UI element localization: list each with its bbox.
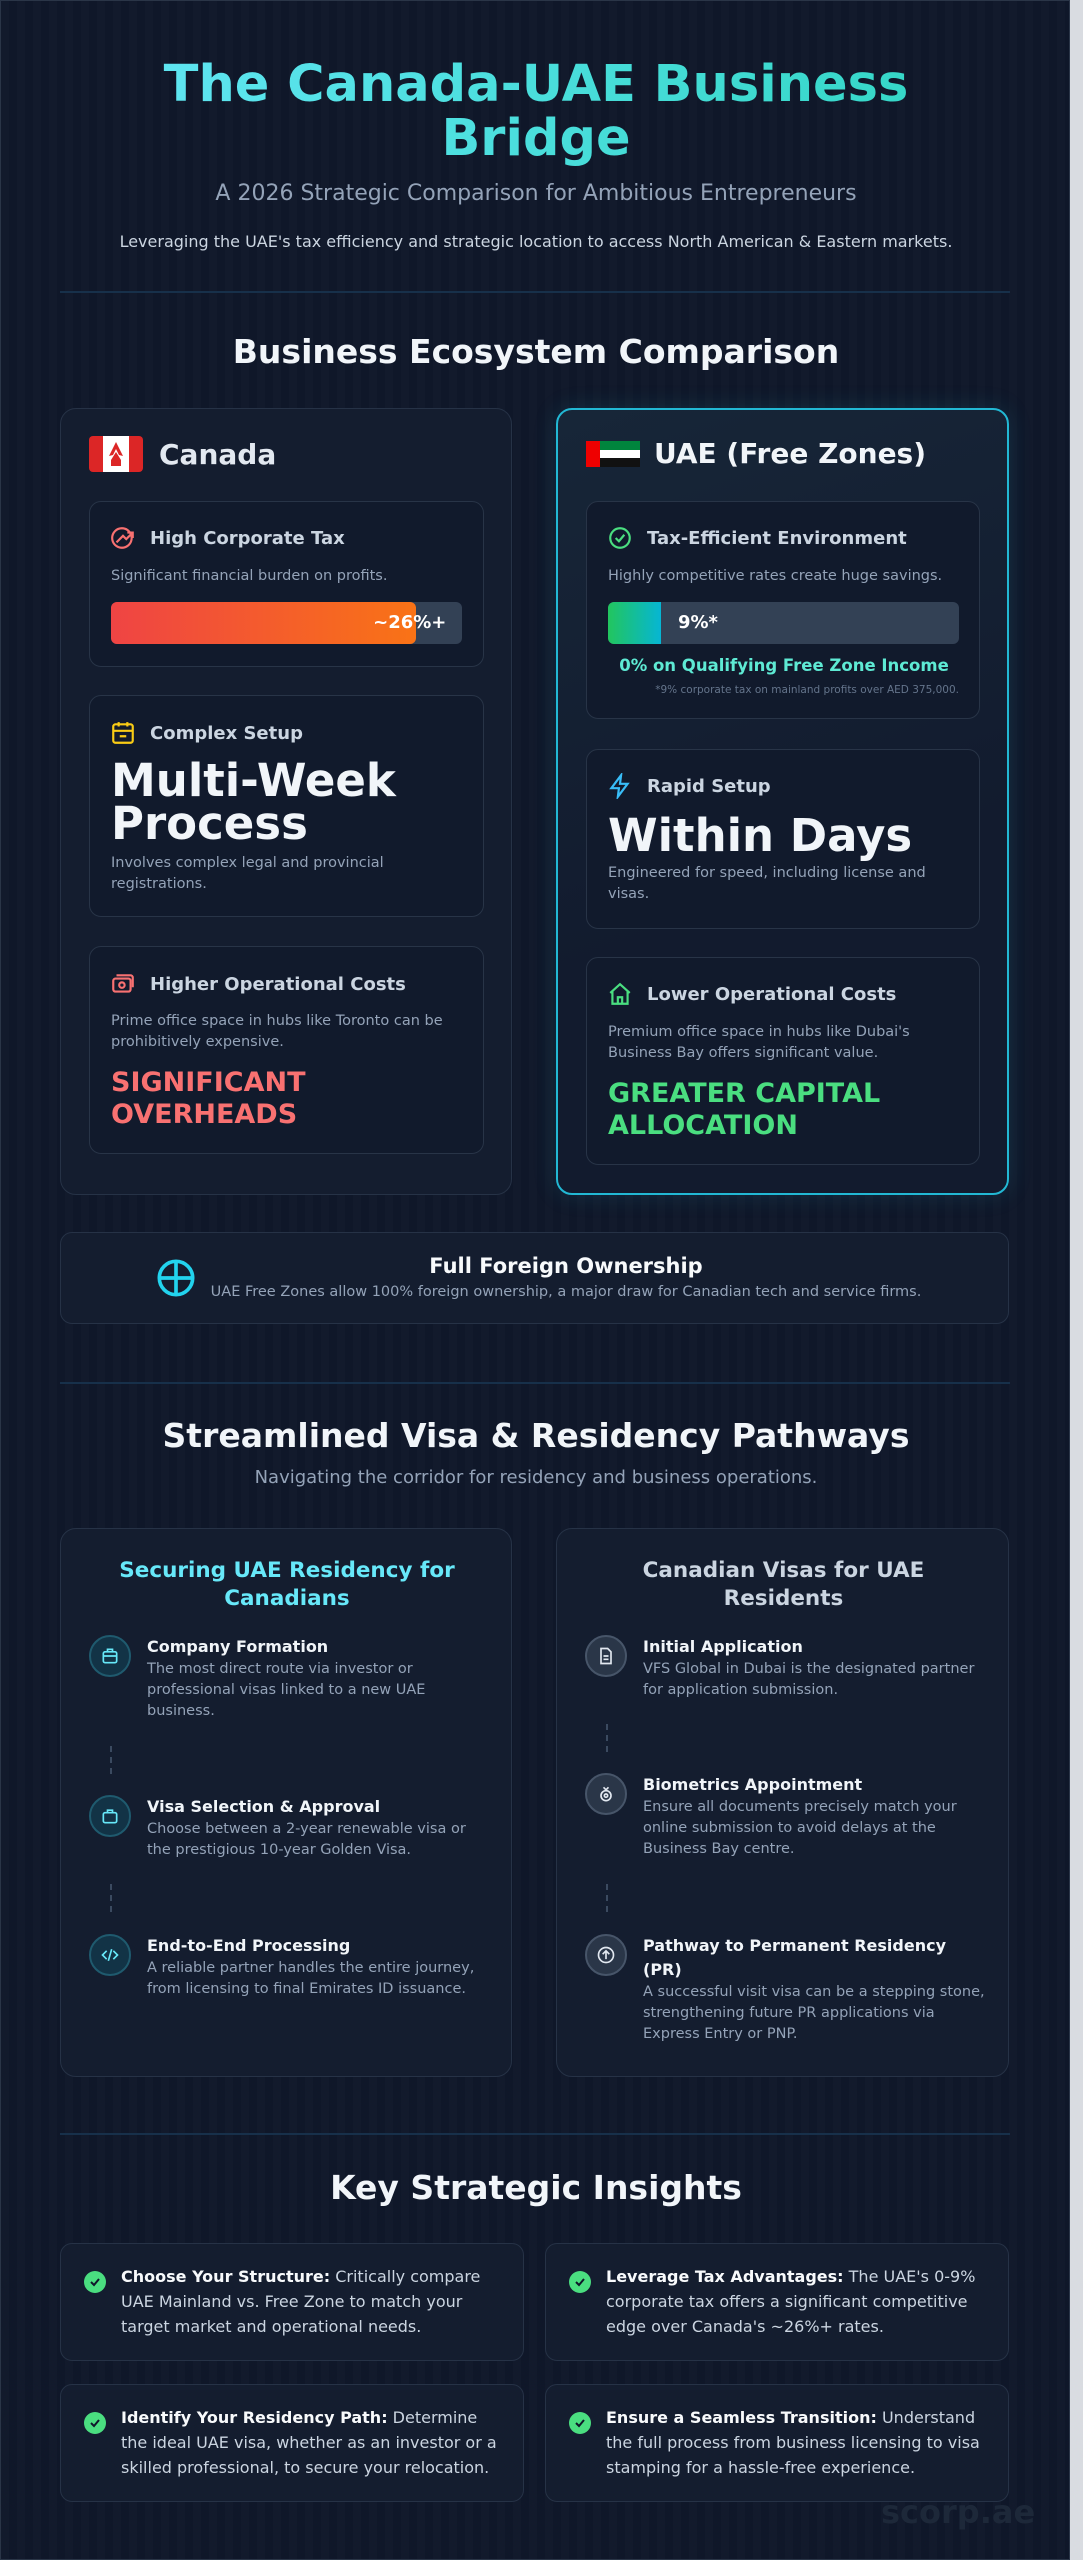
- card: tax efficient: Highly competitive rates create huge savings.: [608, 568, 942, 584]
- step: pathway to PR: [585, 1934, 985, 2042]
- callout: full foreign ownership: [60, 1232, 1009, 1324]
- tagline: Leveraging the UAE's tax efficiency and strategic location to access North American & Eastern markets.: [120, 232, 952, 251]
- title: [1, 58, 1071, 166]
- visa subtitle: Navigating the corridor for residency and business operations.: [255, 1467, 817, 1488]
- insight: structure: [60, 2243, 524, 2361]
- card: high corporate tax: Significant financial burden on profits.: [111, 568, 387, 584]
- panel: uae residency for canadians: Canadians: [224, 1586, 350, 1611]
- panel: uae residency for canadians: End-to-End Processing: [147, 1936, 350, 1955]
- card: higher operational costs: Higher Operational Costs: [150, 974, 406, 994]
- card: complex setup: [89, 695, 484, 917]
- canada header: Canada: [159, 438, 276, 470]
- card: rapid setup: [586, 749, 980, 929]
- panel: canadian visas: Ensure all documents precisely match your online submission to avoid delays at the Business Bay centre.: [643, 1799, 957, 1857]
- card: tax efficient: [586, 501, 980, 719]
- panel: uae residency for canadians: [60, 1528, 512, 2077]
- card: lower operational costs: Lower Operational Costs: [647, 984, 896, 1004]
- heading: visa: Streamlined Visa & Residency Pathways: [163, 1416, 909, 1455]
- step: initial application: [585, 1635, 974, 1698]
- panel: uae residency for canadians: Visa Selection & Approval: [147, 1797, 380, 1816]
- card: lower operational costs: ALLOCATION: [608, 1110, 798, 1141]
- card: tax efficient: 0% on Qualifying Free Zone Income: [619, 656, 949, 675]
- card: rapid setup: Engineered for speed, including license and visas.: [608, 865, 926, 902]
- card: tax efficient: *9% corporate tax on mainland profits over AED 375,000.: [655, 684, 959, 696]
- bar chart: 9%: [608, 602, 959, 644]
- insight: tax: [545, 2243, 1009, 2361]
- card: higher operational costs: OVERHEADS: [111, 1099, 297, 1130]
- panel: uae residency for canadians: Securing UAE Residency for: [119, 1558, 455, 1583]
- insight: tax: Leverage Tax Advantages: The UAE's 0-9% corporate tax offers a significant competitive edge over Canada's ~26%+ rates.: [606, 2267, 975, 2336]
- panel: canadian visas: Biometrics Appointment: [643, 1775, 862, 1794]
- card: lower operational costs: [586, 957, 980, 1165]
- icon: globe: [158, 1260, 194, 1296]
- insight: structure: Choose Your Structure: Critically compare UAE Mainland vs. Free Zone to match your target market and operational needs.: [121, 2267, 480, 2336]
- card: complex setup: Process: [111, 797, 308, 850]
- card: complex setup: Multi-Week: [111, 754, 396, 807]
- card: high corporate tax: [89, 501, 484, 667]
- callout: full foreign ownership: Full Foreign Ownership: [429, 1254, 703, 1278]
- panel: uae residency for canadians: The most direct route via investor or professional visas linked to a new UAE business.: [147, 1661, 425, 1719]
- bar chart: 26%: ~26%+: [373, 612, 446, 633]
- card: complex setup: Involves complex legal and provincial registrations.: [111, 855, 384, 892]
- panel: uae residency for canadians: A reliable partner handles the entire journey, from licensing to final Emirates ID issuance.: [147, 1960, 474, 1997]
- card: tax efficient: Tax-Efficient Environment: [647, 528, 907, 548]
- watermark: scorp.ae: [881, 2493, 1035, 2531]
- bar chart: 26%: [111, 602, 462, 644]
- heading: business ecosystem: Business Ecosystem Comparison: [233, 332, 839, 371]
- step: company formation: [89, 1635, 425, 1719]
- card: higher operational costs: Prime office space in hubs like Toronto can be prohibitively expensive.: [111, 1013, 443, 1050]
- panel: canadian visas: Residents: [724, 1586, 843, 1611]
- card: rapid setup: Within Days: [608, 809, 912, 862]
- step: biometrics: [585, 1773, 957, 1857]
- panel: uae residency for canadians: Company Formation: [147, 1637, 328, 1656]
- step: visa selection: [89, 1795, 466, 1858]
- card: higher operational costs: [89, 946, 484, 1154]
- panel: canadian visas: (PR): [643, 1960, 682, 1979]
- step: end-to-end: [89, 1934, 474, 1997]
- panel: canadian visas: Canadian Visas for UAE: [643, 1558, 924, 1583]
- uae header: UAE (Free Zones): [654, 437, 926, 470]
- card: high corporate tax: High Corporate Tax: [150, 528, 345, 548]
- panel: canadian visas: [556, 1528, 1009, 2077]
- canada header: [89, 436, 276, 472]
- card: higher operational costs: SIGNIFICANT: [111, 1067, 306, 1098]
- heading: insights: Key Strategic Insights: [330, 2168, 742, 2207]
- callout: full foreign ownership: UAE Free Zones allow 100% foreign ownership, a major draw for Canadian tech and service firms.: [211, 1284, 921, 1300]
- subtitle: A 2026 Strategic Comparison for Ambitious Entrepreneurs: [215, 181, 857, 206]
- insight: residency: Identify Your Residency Path: Determine the ideal UAE visa, whether as an investor or a skilled professional, to secure your relocation.: [121, 2408, 497, 2477]
- insight: transition: Ensure a Seamless Transition: Understand the full process from business licensing to visa stamping for a hassle-free experience.: [606, 2408, 980, 2477]
- panel: canadian visas: Initial Application: [643, 1637, 803, 1656]
- card: lower operational costs: Premium office space in hubs like Dubai's Business Bay offers significant value.: [608, 1024, 910, 1061]
- title: The Canada-UAE Business: [164, 55, 908, 114]
- insight: transition: [545, 2384, 1009, 2502]
- bar chart: 9%: 9%*: [678, 612, 718, 633]
- panel: canada: [60, 408, 512, 1195]
- panel: canadian visas: Pathway to Permanent Residency: [643, 1936, 946, 1955]
- card: rapid setup: Rapid Setup: [647, 776, 771, 796]
- panel: canadian visas: VFS Global in Dubai is the designated partner for application submission.: [643, 1661, 974, 1698]
- card: complex setup: Complex Setup: [150, 722, 303, 744]
- panel: canadian visas: A successful visit visa can be a stepping stone, strengthening future PR applications via Express Entry or PNP.: [643, 1984, 985, 2042]
- card: lower operational costs: GREATER CAPITAL: [608, 1078, 880, 1109]
- insight: residency: [60, 2384, 524, 2502]
- panel: uae: [556, 408, 1009, 1195]
- title: Bridge: [441, 109, 631, 168]
- panel: uae residency for canadians: Choose between a 2-year renewable visa or the prestigious 10-year Golden Visa.: [147, 1821, 466, 1858]
